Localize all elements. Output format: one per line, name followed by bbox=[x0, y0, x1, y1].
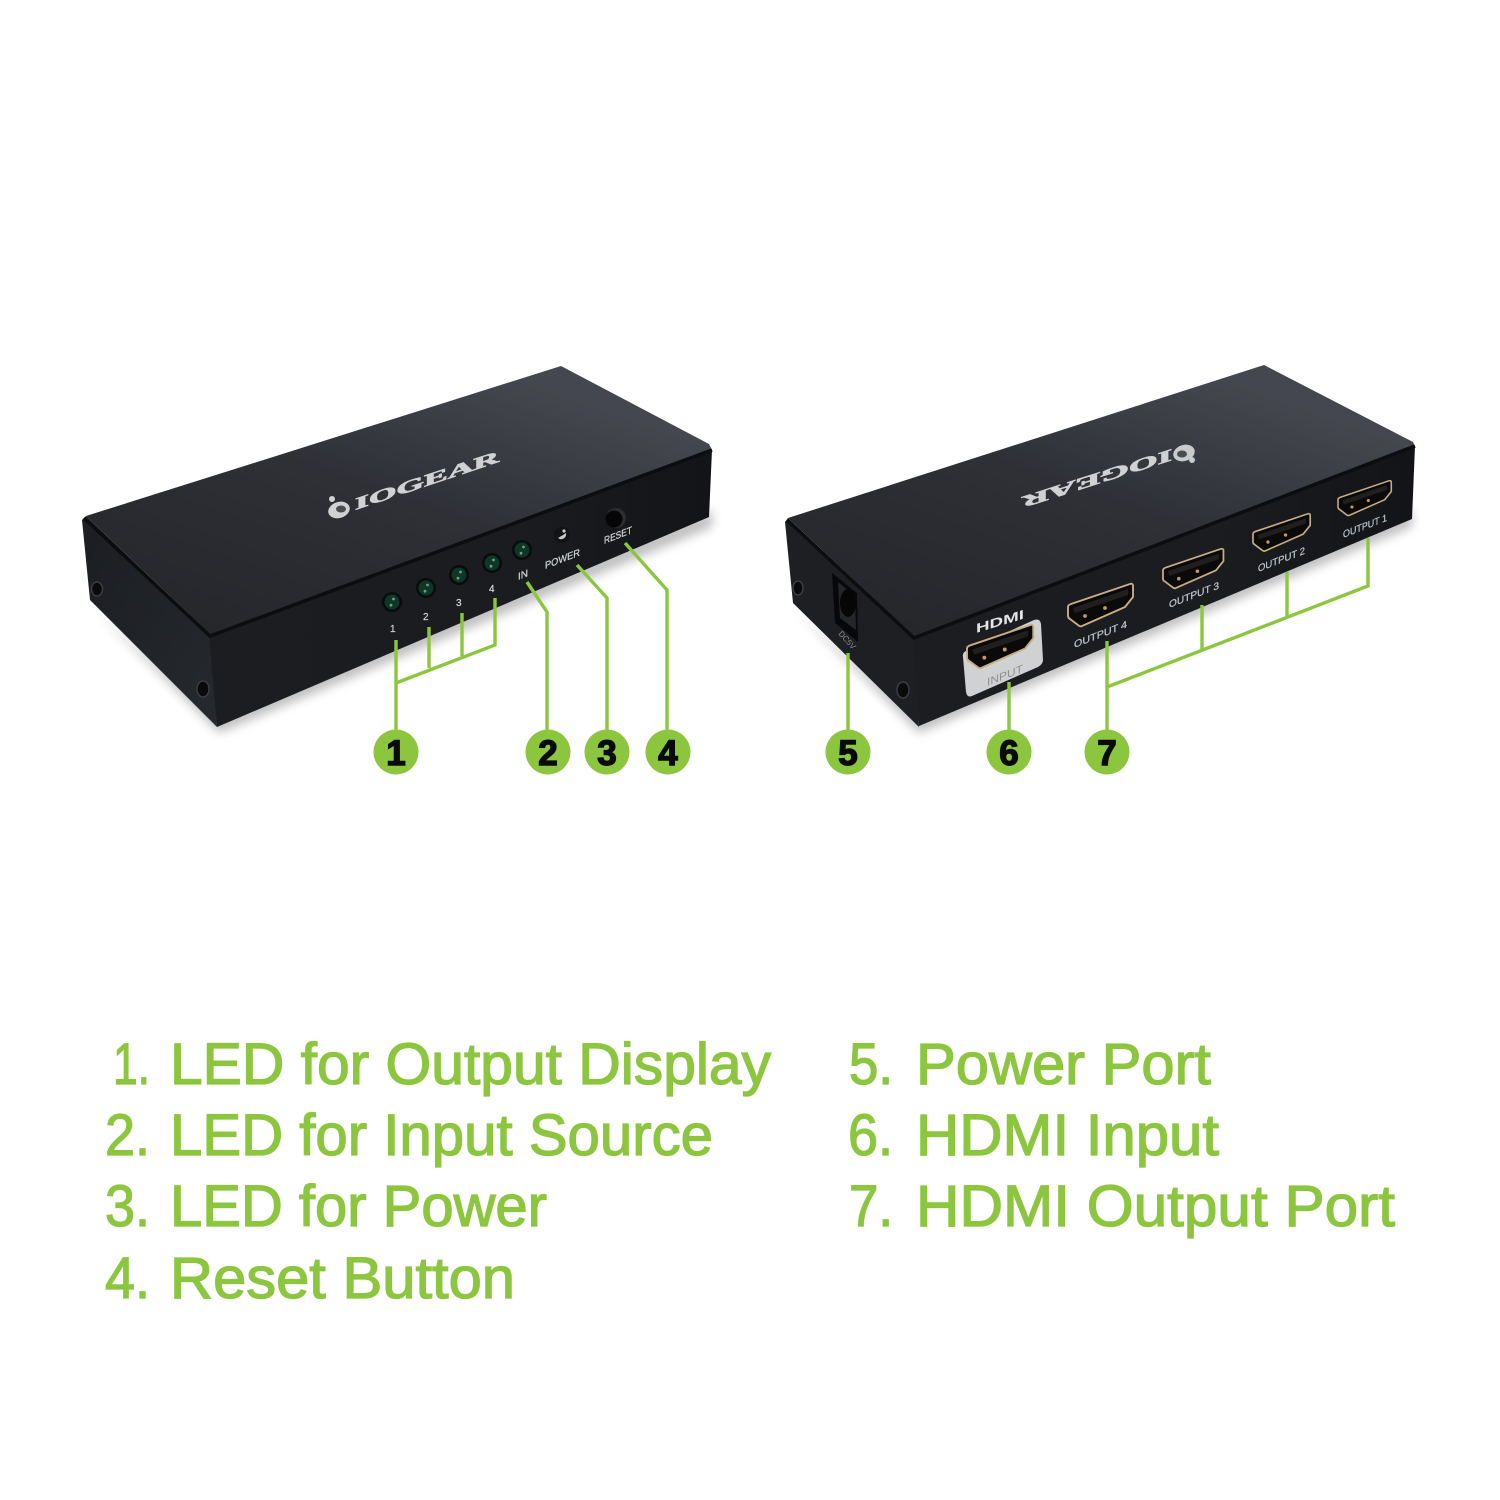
power port recess bbox=[832, 573, 858, 642]
output ports bbox=[1068, 481, 1391, 626]
LED indicators bbox=[382, 508, 626, 612]
badge 4: 4 bbox=[658, 734, 678, 773]
badge 3 bbox=[584, 730, 630, 774]
HDMI input plate bbox=[963, 620, 1043, 696]
edge bevel bbox=[84, 450, 712, 636]
output labels bbox=[1074, 513, 1387, 651]
device: front view with LEDs bbox=[82, 366, 712, 733]
badge 5 bbox=[826, 730, 870, 774]
legend: left column: LED for Power bbox=[170, 1174, 547, 1239]
output labels: OUTPUT 2 bbox=[1258, 546, 1305, 575]
legend: right column bbox=[848, 1032, 1395, 1239]
badge 1 bbox=[374, 730, 418, 774]
legend: left column bbox=[105, 1032, 771, 1311]
logo: IOGEAR upside down: IOGEAR bbox=[1021, 445, 1172, 513]
output labels: OUTPUT 1 bbox=[1343, 513, 1387, 541]
panel labels: 1 bbox=[390, 624, 396, 635]
screws bbox=[92, 582, 209, 697]
legend: left column: 4. bbox=[105, 1246, 150, 1311]
legend: right column: 5. bbox=[849, 1032, 893, 1097]
panel labels: 3 bbox=[456, 598, 462, 609]
logo: IOGEAR: IOGEAR bbox=[355, 446, 500, 514]
badge 3: 3 bbox=[597, 734, 617, 773]
device front face bbox=[209, 450, 712, 727]
badge 6: 6 bbox=[999, 734, 1019, 773]
HDMI mark: HDMI bbox=[976, 607, 1024, 636]
legend: left column: LED for Input Source bbox=[170, 1103, 713, 1168]
legend: right column: 6. bbox=[848, 1103, 893, 1168]
badge 6 bbox=[986, 730, 1032, 774]
legend: right column: Power Port bbox=[916, 1032, 1211, 1097]
output labels: OUTPUT 4 bbox=[1074, 620, 1127, 651]
panel labels: POWER bbox=[545, 548, 580, 572]
panel labels bbox=[390, 525, 633, 635]
rear top face bbox=[788, 365, 1415, 637]
logo: IOGEAR bbox=[326, 446, 500, 521]
badge 2: 2 bbox=[538, 734, 558, 773]
callout lines bbox=[396, 538, 1368, 735]
legend: left column: 1. bbox=[113, 1032, 150, 1097]
badge 1: 1 bbox=[386, 734, 406, 773]
badge 7: 7 bbox=[1097, 734, 1117, 773]
HDMI input port bbox=[967, 625, 1033, 668]
device top face bbox=[86, 366, 712, 635]
badge 5: 5 bbox=[838, 734, 858, 773]
badge 4 bbox=[646, 730, 690, 774]
legend: right column: HDMI Input bbox=[916, 1103, 1219, 1168]
badge 2 bbox=[526, 730, 570, 774]
legend: right column: HDMI Output Port bbox=[916, 1174, 1395, 1239]
rear end face bbox=[785, 518, 919, 727]
legend: left column: 2. bbox=[105, 1103, 150, 1168]
INPUT label: INPUT bbox=[987, 663, 1023, 689]
panel labels: 4 bbox=[489, 584, 495, 595]
device: rear view with ports bbox=[785, 365, 1415, 733]
edge bevel bbox=[787, 446, 1415, 638]
panel labels: IN bbox=[518, 568, 528, 583]
DC label: DC5V bbox=[837, 629, 858, 652]
device end face bbox=[82, 516, 217, 727]
screws bbox=[793, 581, 909, 698]
legend: left column: Reset Button bbox=[170, 1246, 515, 1311]
panel labels: RESET bbox=[604, 525, 633, 547]
output labels: OUTPUT 3 bbox=[1169, 581, 1219, 611]
legend: right column: 7. bbox=[849, 1174, 893, 1239]
logo: IOGEAR upside down bbox=[1021, 442, 1197, 513]
legend: left column: 3. bbox=[105, 1174, 150, 1239]
badge 7 bbox=[1084, 730, 1130, 774]
panel labels: 2 bbox=[423, 612, 429, 623]
rear front face bbox=[913, 446, 1415, 726]
legend: left column: LED for Output Display bbox=[170, 1032, 771, 1097]
